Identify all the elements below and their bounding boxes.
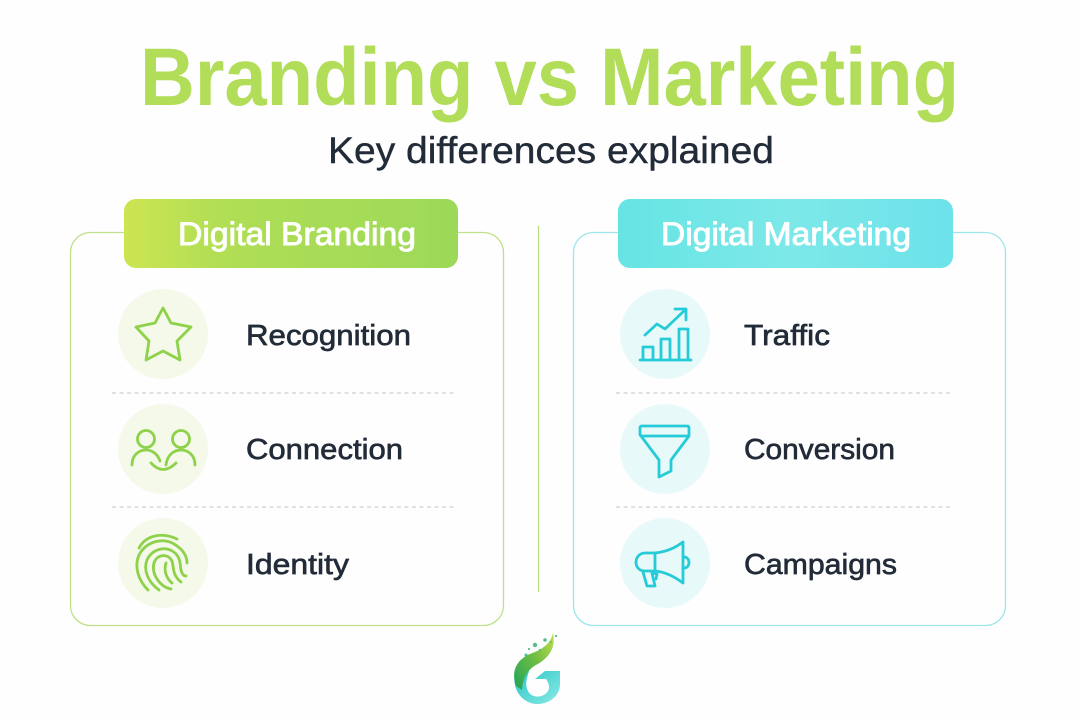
- label: connection: Connection: [246, 434, 403, 466]
- icon: fingerprint: [118, 518, 208, 608]
- row: traffic: [620, 289, 830, 379]
- label: identity: Identity: [246, 549, 350, 581]
- row: campaigns: [620, 518, 897, 608]
- label: traffic: Traffic: [744, 320, 830, 352]
- heading pill: [124, 199, 458, 268]
- subtitle: Key differences explained: [328, 130, 774, 171]
- label: conversion: Conversion: [744, 434, 895, 466]
- panel: digital marketing: [574, 199, 1006, 626]
- logo dots: [524, 635, 557, 656]
- logo green leaf: [514, 633, 554, 690]
- row: connection: [118, 404, 403, 494]
- panel: digital branding: [70, 199, 504, 626]
- icon: people: [118, 404, 208, 494]
- icon: growth chart: [620, 289, 710, 379]
- logo: [514, 633, 560, 704]
- panel outline: [70, 232, 504, 626]
- logo teal G body: [514, 668, 560, 704]
- center divider: [538, 226, 540, 592]
- icon: megaphone: [620, 518, 710, 608]
- heading pill: Digital Branding: [178, 216, 416, 252]
- panel outline: [574, 232, 1006, 626]
- heading pill: Digital Marketing: [661, 216, 911, 252]
- icon: star: [118, 289, 208, 379]
- label: campaigns: Campaigns: [744, 549, 897, 581]
- row: identity: [118, 518, 350, 608]
- row: conversion: [620, 404, 895, 494]
- heading pill: [618, 199, 953, 268]
- title: Branding vs Marketing: [140, 32, 959, 123]
- row: recognition: [118, 289, 411, 379]
- label: recognition: Recognition: [246, 320, 411, 352]
- icon: funnel: [620, 404, 710, 494]
